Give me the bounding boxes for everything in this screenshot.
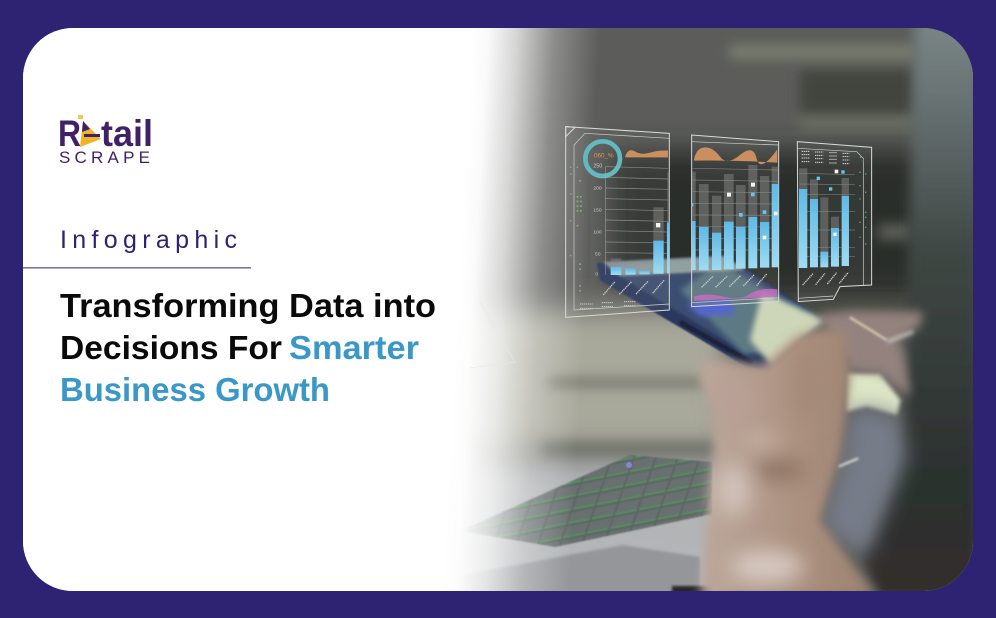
y axis labels: 50 — [595, 251, 601, 257]
grid lines — [799, 173, 855, 257]
photo: phone — [597, 255, 826, 372]
divider under label — [23, 267, 251, 269]
y axis labels: 150 — [593, 207, 602, 213]
white fade overlay — [23, 28, 643, 591]
logo: Retail Scrape: tail — [101, 113, 153, 154]
photo: right sleeve — [862, 20, 980, 600]
panel: right chart — [797, 142, 872, 302]
logo subtitle: SCRAPE — [59, 148, 150, 167]
title — [60, 287, 436, 408]
data dots — [570, 167, 582, 292]
grid lines — [605, 167, 668, 275]
chart: holographic dashboard — [566, 127, 872, 317]
y axis labels: 100 — [593, 229, 602, 235]
label: Infographic: Infographic — [60, 226, 237, 254]
logo: Retail Scrape — [58, 113, 153, 167]
bars — [799, 168, 849, 268]
panel: middle chart — [692, 135, 779, 307]
rotated labels — [702, 274, 767, 287]
gauge: 060 percent — [585, 141, 620, 176]
area: orange — [625, 150, 668, 157]
panel: left chart — [566, 127, 669, 317]
title: Transforming Data into — [60, 287, 436, 324]
logo icon: yellow cursor — [78, 115, 101, 147]
green reflected screen — [846, 373, 901, 415]
photo: blurred background — [440, 28, 973, 600]
logo wordmark: R — [58, 113, 81, 154]
y axis labels: 0 — [595, 272, 598, 278]
faint panel outline — [470, 302, 515, 368]
y axis labels: 200 — [593, 185, 602, 191]
data dots — [859, 157, 866, 245]
header text rows — [802, 151, 849, 164]
gauge: 060 percent: 250 — [593, 163, 602, 169]
title: Decisions For — [60, 329, 282, 366]
rotated labels — [603, 280, 664, 295]
title: Business Growth — [60, 371, 330, 408]
bars — [692, 165, 779, 270]
photo: laptop keyboard — [468, 455, 712, 591]
area: pink — [694, 289, 777, 301]
gauge: 060 percent: 060_% — [594, 153, 614, 160]
area: orange — [694, 147, 777, 164]
title: Smarter — [289, 329, 419, 366]
upper finger — [817, 310, 923, 397]
bars — [611, 172, 669, 275]
rotated labels — [803, 272, 848, 285]
blue-grey shirt fold — [820, 407, 907, 557]
photo: hand — [699, 310, 923, 597]
y axis labels — [593, 185, 602, 278]
grid lines — [693, 168, 777, 250]
hand and wrist — [699, 329, 877, 597]
